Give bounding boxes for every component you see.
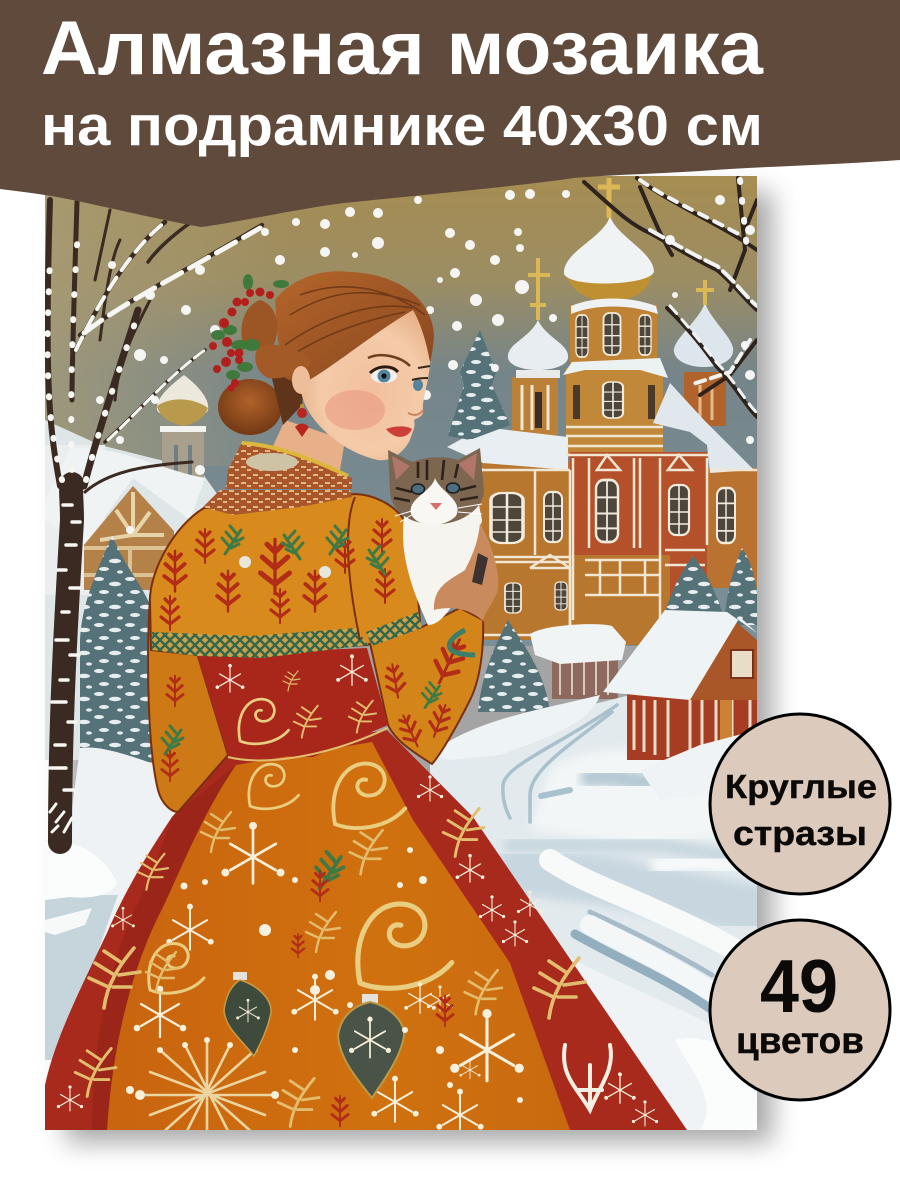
snow ground	[45, 748, 176, 954]
left bare tree	[48, 200, 262, 842]
tree snow	[48, 222, 260, 832]
snow hump	[430, 695, 600, 760]
hanging ornament left	[224, 972, 271, 1056]
decorative band	[152, 628, 368, 658]
church	[447, 178, 757, 645]
bun	[218, 379, 282, 435]
red border ornaments	[57, 776, 658, 1126]
tier snow	[571, 298, 658, 314]
earring	[295, 404, 309, 437]
waist hem	[228, 728, 388, 760]
gold dome base	[568, 275, 652, 300]
nose	[408, 410, 423, 415]
windows	[491, 313, 735, 613]
left distant church	[157, 375, 208, 482]
right wing	[705, 468, 757, 588]
skirt orange	[107, 742, 570, 1130]
left border shade	[92, 765, 236, 1130]
badge: 49 colors	[710, 920, 890, 1100]
badge: 49 colors: 49	[760, 944, 838, 1028]
sky	[45, 176, 757, 646]
right bare tree	[584, 178, 757, 417]
hand	[434, 523, 498, 622]
central tower upper	[570, 305, 657, 365]
hair roll upper	[241, 300, 277, 348]
snow road	[503, 705, 757, 1010]
lower ochre section	[570, 555, 670, 645]
distant snowfield	[45, 420, 217, 760]
cuff band	[366, 612, 422, 646]
right dome	[674, 280, 733, 426]
collar light patch	[246, 453, 298, 471]
painting: winter scene	[45, 176, 760, 1140]
cheek	[325, 390, 385, 430]
cat stripes	[394, 460, 478, 501]
central section red	[570, 452, 707, 598]
left wing	[480, 462, 572, 640]
waist ornaments	[216, 655, 376, 744]
under hair	[270, 370, 305, 425]
ear	[292, 366, 310, 394]
white flower on border	[564, 1045, 611, 1110]
eye near	[368, 355, 410, 383]
neck	[262, 420, 345, 490]
building trim	[480, 427, 757, 640]
left dome	[508, 258, 568, 437]
right tree snow	[640, 180, 757, 413]
left sky warm tint	[45, 195, 245, 466]
hair cap	[275, 271, 434, 385]
badge: 49 colors: цветов	[736, 1020, 864, 1061]
central tower middle	[566, 368, 663, 454]
hair strands	[285, 287, 425, 360]
cat white muzzle	[411, 478, 458, 525]
falling snow	[96, 189, 755, 534]
small shed	[530, 624, 626, 699]
snow blue shade	[45, 895, 118, 1060]
cat ears	[392, 453, 477, 480]
face	[300, 308, 430, 460]
dress dots	[126, 847, 523, 1103]
cat	[388, 448, 498, 625]
snow lower	[565, 955, 757, 1130]
cat eyes	[412, 483, 460, 494]
starburst	[140, 1040, 275, 1140]
snow upper bank	[533, 749, 715, 840]
skirt base red	[45, 730, 687, 1130]
cat whiskers	[395, 504, 482, 522]
cat head	[388, 448, 484, 524]
background haze	[45, 445, 105, 595]
lips	[386, 426, 412, 437]
cat nose	[430, 503, 442, 510]
sleeve seam	[348, 497, 360, 640]
cat body	[403, 500, 482, 625]
title line 2: на подрамнике 40x30 см	[41, 94, 763, 158]
title line 1: Алмазная мозаика	[41, 6, 764, 91]
badge: round rhinestones	[710, 714, 890, 894]
main cross	[598, 178, 620, 218]
main dome	[564, 216, 654, 284]
badge: round rhinestones: Круглые	[725, 768, 877, 805]
cat paw	[472, 553, 488, 585]
evergreens	[448, 330, 760, 712]
collar	[226, 442, 352, 489]
jacket	[150, 494, 420, 655]
right roof	[653, 383, 754, 473]
snow ground right	[430, 696, 757, 1024]
right sleeve	[370, 608, 483, 764]
eye far	[412, 366, 430, 391]
collar gold edge	[242, 443, 348, 476]
hut snow bank	[640, 730, 757, 800]
snow white patch	[45, 908, 92, 935]
hair roll lower	[255, 345, 312, 378]
jacket embroidery	[161, 519, 475, 781]
canvas shadow	[66, 192, 772, 1142]
snow lower white	[675, 1038, 757, 1130]
left wooden house	[84, 486, 174, 590]
lower collar	[203, 490, 352, 515]
skirt ornaments	[135, 764, 522, 1140]
hanging ornament right	[338, 994, 404, 1098]
left sleeve	[148, 597, 228, 812]
red hut	[603, 610, 757, 762]
left roof	[447, 427, 568, 470]
left snow drift	[45, 841, 116, 900]
left snowy roof	[105, 450, 205, 518]
woman	[45, 271, 687, 1140]
berry wreath	[209, 274, 289, 392]
badge: round rhinestones: стразы	[733, 815, 867, 853]
left evergreen	[80, 535, 160, 762]
brown title banner	[0, 0, 900, 227]
red waist	[197, 648, 388, 757]
